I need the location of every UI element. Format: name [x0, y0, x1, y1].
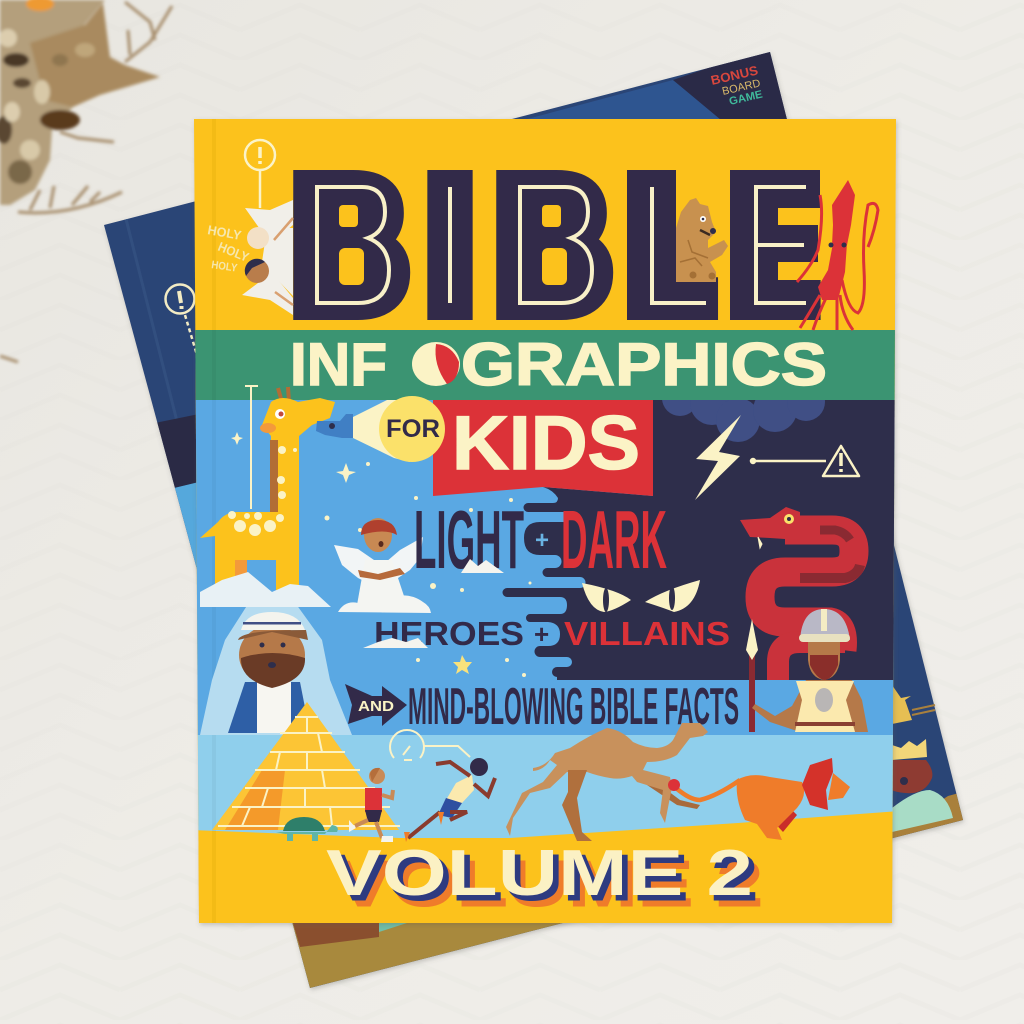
- turtle: [276, 817, 338, 841]
- face: [239, 625, 305, 685]
- warning icon: [751, 446, 859, 476]
- volume 2 heading: VOLUME 2: [326, 836, 753, 909]
- small cloud under heroes: [363, 638, 428, 648]
- and arrow: AND: [358, 698, 394, 715]
- holy labels: [206, 222, 251, 275]
- kids heading: KIDS: [452, 401, 640, 486]
- bonus board game label: BONUS: [709, 62, 760, 88]
- singing angel: [334, 518, 431, 613]
- speedometer: [390, 730, 470, 760]
- sprinter: [404, 758, 495, 842]
- back book: Bible Infographics for Kids volume 1: [104, 45, 970, 988]
- light beam: [353, 400, 415, 462]
- aura: [200, 604, 352, 735]
- giraffe with flashlight: [200, 387, 353, 595]
- lightning bolt: [695, 415, 741, 500]
- goliath soldier: [752, 609, 868, 732]
- letter body thickening: [328, 170, 820, 320]
- back book bonus corner: [673, 52, 787, 119]
- back book bottom gold band: [285, 923, 570, 988]
- heroes and villains headings: VILLAINS: [564, 615, 730, 652]
- back book mint robe: [892, 790, 953, 832]
- prophet with beard: [200, 572, 352, 735]
- light and dark headings: +: [535, 527, 549, 554]
- back book left dark band: [157, 414, 196, 488]
- heading: Bible: B: [495, 142, 611, 349]
- spine crease: [212, 119, 216, 924]
- infographics heading: GRAPHICS: [461, 331, 827, 398]
- holy labels: HOLY: [211, 259, 239, 275]
- back book top blue panel: [528, 80, 720, 119]
- angel heads: [247, 227, 269, 249]
- storm cloud: [662, 400, 825, 442]
- holy labels: HOLY: [206, 222, 243, 243]
- front book cover: DARK: [561, 493, 667, 586]
- angel wings and robes: [245, 200, 293, 236]
- volume 2 heading: VOLUME 2: [331, 841, 758, 914]
- infographics heading: INF: [290, 331, 387, 398]
- red banner: [433, 400, 653, 496]
- green band: [190, 330, 900, 400]
- bonus board game label: [709, 62, 764, 108]
- back book alert icon: [166, 284, 197, 355]
- dark side panel with wavy fingers: [502, 400, 900, 680]
- small cloud under light: [461, 559, 504, 573]
- heading: Bible: B: [292, 142, 408, 349]
- bonus board game label: BOARD: [721, 77, 762, 98]
- front book cover: [190, 119, 900, 930]
- heroes and villains headings: [374, 615, 730, 652]
- spear: [746, 619, 758, 732]
- dried plant decoration: [0, 0, 172, 362]
- holy holy holy angels: [206, 200, 293, 315]
- serpent: [740, 507, 860, 680]
- heading: Bible: E: [732, 142, 818, 349]
- back book tan corner: [892, 794, 963, 838]
- camel: [506, 723, 708, 841]
- villain eyes: [582, 580, 700, 612]
- and arrow: [345, 684, 407, 726]
- pie chart letter O: [412, 342, 460, 386]
- heroes and villains headings: +: [534, 619, 549, 649]
- light blue desert sky band: [190, 735, 900, 845]
- back book king figure: [892, 685, 935, 793]
- giant squid: [797, 180, 878, 330]
- back book spine highlight: [124, 219, 178, 418]
- for badge: [379, 396, 445, 462]
- light and dark headings: LIGHT: [414, 493, 524, 586]
- starry sky: [231, 432, 532, 677]
- holy labels: HOLY: [216, 239, 251, 265]
- volume 2 heading: [326, 836, 763, 920]
- for badge: FOR: [386, 415, 440, 443]
- robe: [228, 682, 310, 733]
- height line beside giraffe: [245, 386, 258, 509]
- bear: [676, 198, 728, 282]
- bonus board game label: GAME: [728, 89, 764, 108]
- infographics heading: [290, 331, 827, 398]
- flashlight: [316, 414, 353, 438]
- alert icon with line: [245, 140, 275, 208]
- volume 2 heading: VOLUME 2: [336, 847, 763, 920]
- heading: Bible: [292, 142, 822, 349]
- heading: Bible: I: [426, 142, 474, 349]
- sand: [198, 812, 893, 920]
- turban: [241, 612, 305, 630]
- letter counters: [339, 205, 822, 285]
- clouds behind prophet: [200, 572, 331, 607]
- heroes and villains headings: HEROES: [374, 615, 524, 652]
- boy running: [349, 768, 393, 842]
- light side panel: [190, 400, 900, 735]
- heading: Bible: L: [627, 142, 714, 349]
- lion: [668, 758, 850, 840]
- pyramid: [212, 702, 400, 830]
- back book left blue band: [175, 482, 197, 568]
